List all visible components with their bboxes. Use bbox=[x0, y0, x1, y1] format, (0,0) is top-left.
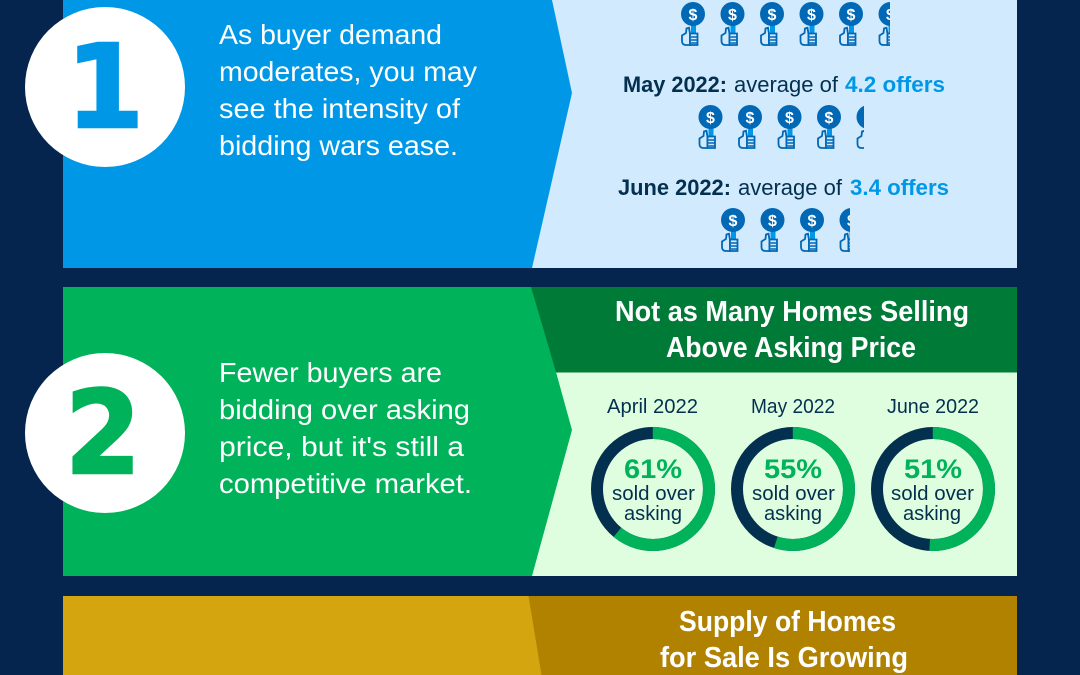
icon row: May offers: $ bbox=[864, 110, 873, 127]
icon row: June offers: $ bbox=[847, 213, 856, 230]
icon: number 1 badge bbox=[25, 7, 185, 167]
text: June offers: 3.4 offers bbox=[850, 175, 949, 200]
icon row: June offers: $ bbox=[808, 213, 817, 230]
icon: number 1 badge: 1 bbox=[66, 20, 144, 154]
text: step 2 description: competitive market. bbox=[219, 468, 472, 499]
icon row: April offers: $ bbox=[689, 7, 698, 24]
icon row: May offers bbox=[698, 105, 880, 148]
donut: April 2022 61%: sold over bbox=[612, 483, 695, 505]
heading: selling above asking bbox=[615, 296, 969, 364]
text: May offers: average of bbox=[734, 72, 839, 97]
donut: June 2022 51%: June 2022 bbox=[887, 396, 979, 418]
icon row: June offers: $ bbox=[768, 213, 777, 230]
icon row: June offers: $ bbox=[729, 213, 738, 230]
panel background: light green bbox=[532, 287, 1017, 576]
text: June offers: average of bbox=[738, 175, 843, 200]
text: step 1 description bbox=[219, 19, 477, 161]
panel background: gold bbox=[63, 596, 543, 675]
donut: April 2022 61%: April 2022 bbox=[607, 396, 698, 418]
icon row: May offers: $ bbox=[825, 110, 834, 127]
icon row: June offers bbox=[721, 208, 864, 251]
panel: step 3 bbox=[63, 596, 1017, 675]
donut: April 2022 61% bbox=[597, 396, 709, 545]
text: June offers bbox=[618, 175, 949, 200]
icon row: April offers: $ bbox=[807, 7, 816, 24]
donut: June 2022 51% bbox=[877, 396, 989, 545]
donut: May 2022 55%: May 2022 bbox=[751, 396, 835, 418]
donut: April 2022 61%: 61% bbox=[624, 454, 682, 484]
donut: May 2022 55%: asking bbox=[764, 503, 822, 525]
text: step 1 description: As buyer demand bbox=[219, 19, 442, 50]
text: step 2 description bbox=[219, 357, 472, 499]
icon row: May offers: $ bbox=[706, 110, 715, 127]
text: step 2 description: Fewer buyers are bbox=[219, 357, 442, 388]
donut: May 2022 55%: sold over bbox=[752, 483, 835, 505]
heading: selling above asking: Not as Many Homes Selling bbox=[615, 296, 969, 328]
icon row: April offers: $ bbox=[728, 7, 737, 24]
panel: step 2 bbox=[25, 287, 1017, 576]
icon: number 2 badge: 2 bbox=[65, 367, 141, 501]
panel background: green chevron bbox=[63, 287, 572, 576]
text: step 1 description: bidding wars ease. bbox=[219, 130, 458, 161]
text: May offers: May 2022: bbox=[623, 72, 727, 97]
panel: step 1 bbox=[25, 0, 1017, 268]
heading: selling above asking: Above Asking Price bbox=[666, 332, 916, 364]
text: June offers: June 2022: bbox=[618, 175, 731, 200]
text: step 1 description: see the intensity of bbox=[219, 93, 460, 124]
text: step 1 description: moderates, you may bbox=[219, 56, 477, 87]
heading band: dark green bbox=[530, 287, 1017, 372]
icon row: April offers: $ bbox=[847, 7, 856, 24]
heading: supply of homes: for Sale Is Growing bbox=[660, 642, 908, 674]
heading: supply of homes: Supply of Homes bbox=[679, 606, 896, 638]
heading band: dark gold bbox=[528, 596, 1017, 675]
text: May offers bbox=[623, 72, 945, 97]
text: May offers: 4.2 offers bbox=[845, 72, 945, 97]
panel background: blue chevron bbox=[63, 0, 572, 268]
icon row: May offers: $ bbox=[785, 110, 794, 127]
panel background: light blue bbox=[532, 0, 1017, 268]
icon row: May offers: $ bbox=[746, 110, 755, 127]
text: step 2 description: bidding over asking bbox=[219, 394, 470, 425]
text: step 2 description: price, but it's still a bbox=[219, 431, 465, 462]
donut: June 2022 51%: asking bbox=[903, 503, 961, 525]
icon row: April offers: $ bbox=[886, 7, 895, 24]
donut: May 2022 55% bbox=[737, 396, 849, 545]
donut: June 2022 51%: sold over bbox=[891, 483, 974, 505]
icon row: April offers bbox=[681, 2, 902, 45]
donut: June 2022 51%: 51% bbox=[904, 454, 962, 484]
icon row: April offers: $ bbox=[768, 7, 777, 24]
donut: April 2022 61%: asking bbox=[624, 503, 682, 525]
donut: May 2022 55%: 55% bbox=[764, 454, 822, 484]
icon: number 2 badge bbox=[25, 353, 185, 513]
heading: supply of homes bbox=[660, 606, 908, 674]
